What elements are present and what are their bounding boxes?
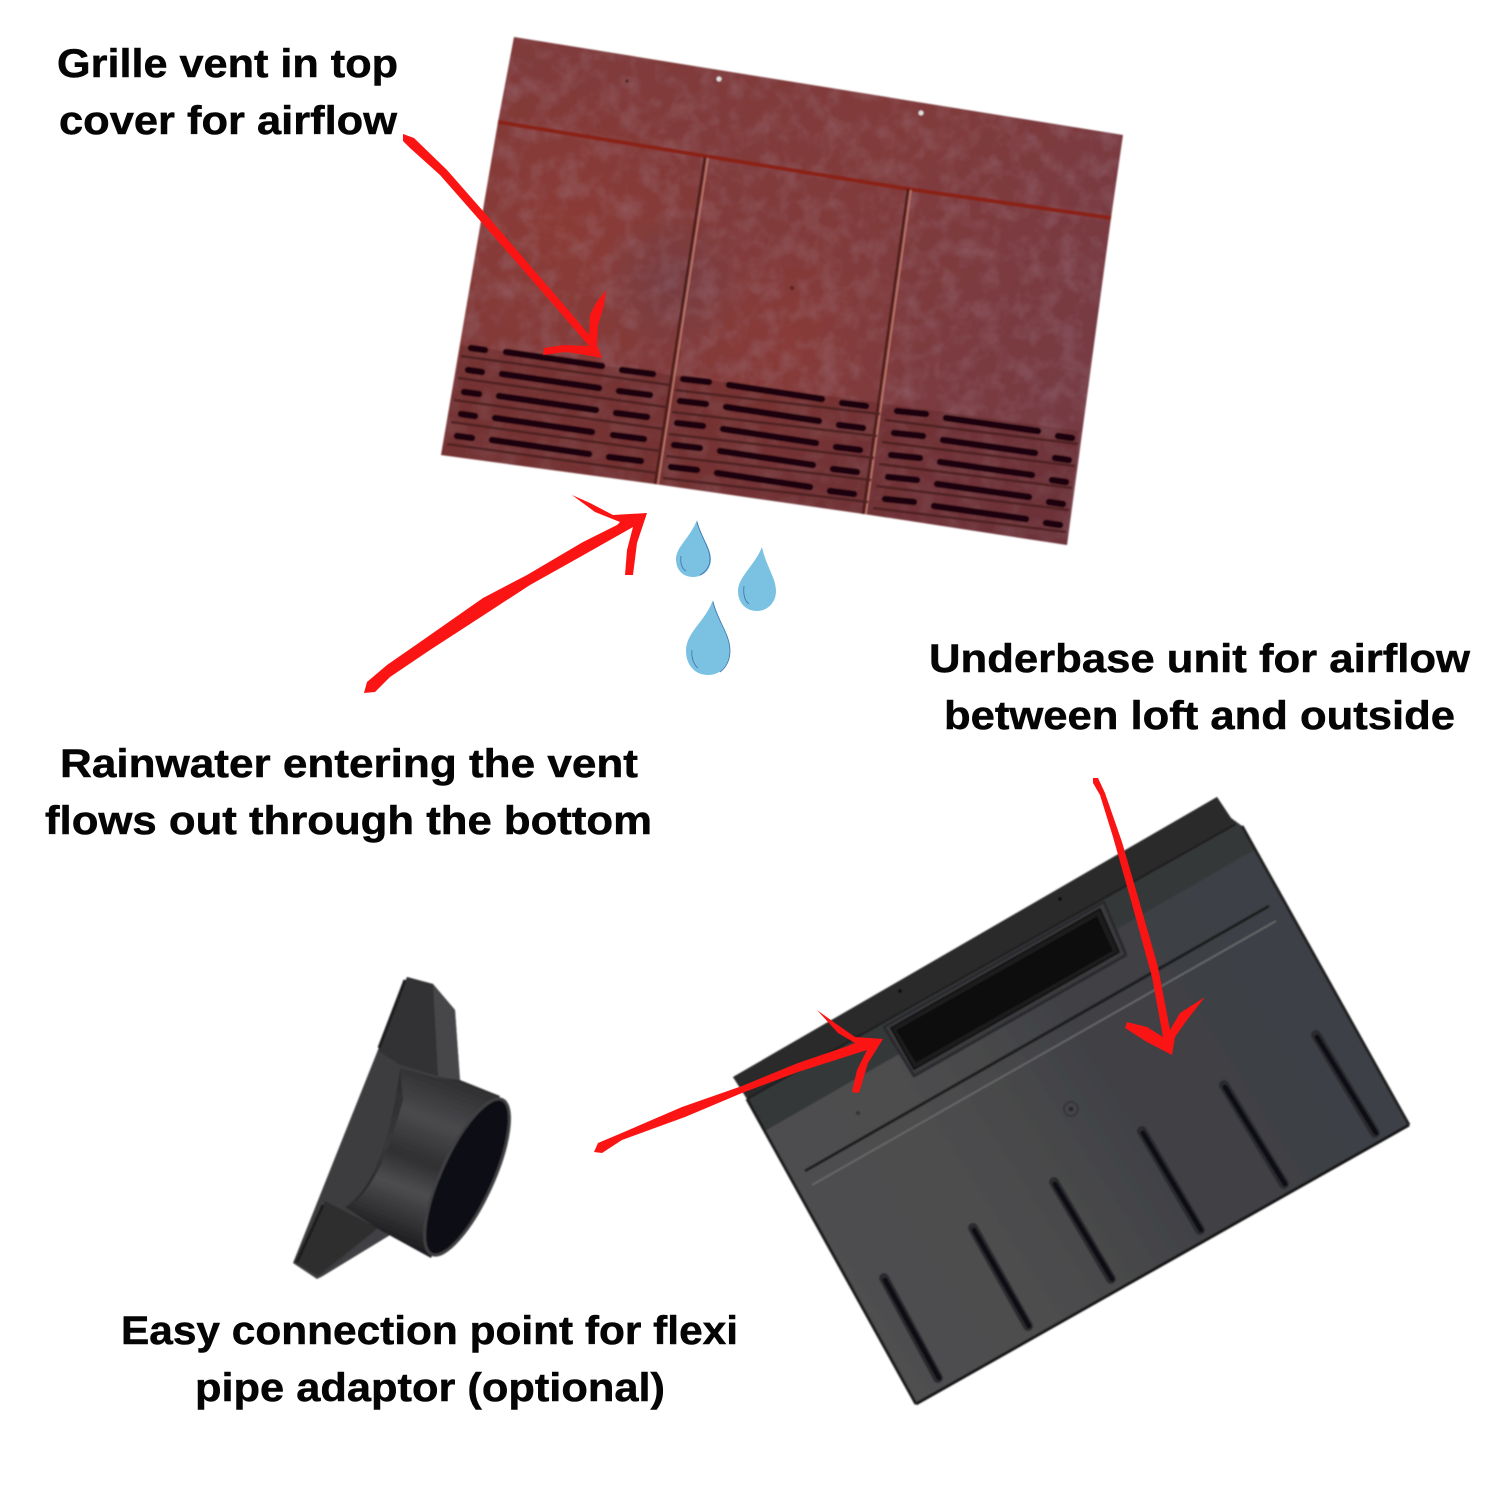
upper flange side bbox=[433, 984, 460, 1080]
grille slots: right tile bbox=[885, 411, 1072, 525]
label: grille vent: cover for airflow bbox=[59, 99, 398, 143]
label: flexi pipe adaptor bbox=[121, 1309, 738, 1410]
grille ridges bbox=[447, 356, 1078, 532]
label: underbase unit: between loft and outside bbox=[944, 694, 1455, 738]
vent opening bbox=[884, 902, 1126, 1076]
label: rainwater: Rainwater entering the vent bbox=[60, 742, 638, 786]
arrow: to underbase unit bbox=[1093, 778, 1205, 1055]
photo: red grille vent tile bbox=[441, 37, 1123, 545]
top strip bbox=[733, 797, 1236, 1099]
lower flange face bbox=[294, 1201, 378, 1276]
tube body bbox=[345, 1068, 500, 1258]
tube opening bbox=[408, 1089, 526, 1265]
photo: black underbase unit bbox=[733, 797, 1409, 1404]
drop 2 bbox=[738, 547, 776, 611]
label: rainwater: flows out through the bottom bbox=[45, 799, 652, 843]
ridge line bbox=[498, 122, 1111, 218]
label: rainwater bbox=[45, 742, 652, 843]
drainage grooves bbox=[884, 1035, 1376, 1378]
lower band bbox=[747, 818, 1256, 1131]
curved collar bbox=[345, 1068, 430, 1228]
arrow: to grille vent bbox=[403, 134, 606, 358]
drop 3 bbox=[686, 600, 730, 675]
grille zone shading bbox=[441, 345, 1079, 545]
label: flexi pipe adaptor: Easy connection point for flexi bbox=[121, 1309, 738, 1353]
arrow: to vent opening bbox=[594, 1010, 883, 1153]
drop 1 bbox=[676, 520, 711, 577]
water drops bbox=[676, 520, 776, 675]
grille slots: left tile bbox=[457, 348, 653, 461]
tile dividers bbox=[655, 157, 911, 514]
photo: flexi pipe adaptor bbox=[293, 977, 526, 1279]
label: flexi pipe adaptor: pipe adaptor (optional) bbox=[195, 1366, 665, 1410]
back plate bbox=[293, 977, 460, 1279]
label: underbase unit bbox=[929, 637, 1471, 738]
long ridge bbox=[812, 921, 1276, 1185]
grille slots: middle tile bbox=[671, 379, 866, 494]
label: underbase unit: Underbase unit for airflow bbox=[929, 637, 1471, 681]
upper flange face bbox=[378, 977, 438, 1076]
label: grille vent: Grille vent in top bbox=[57, 42, 398, 86]
label: grille vent bbox=[57, 42, 398, 143]
arrow: water outlet bbox=[364, 495, 647, 693]
